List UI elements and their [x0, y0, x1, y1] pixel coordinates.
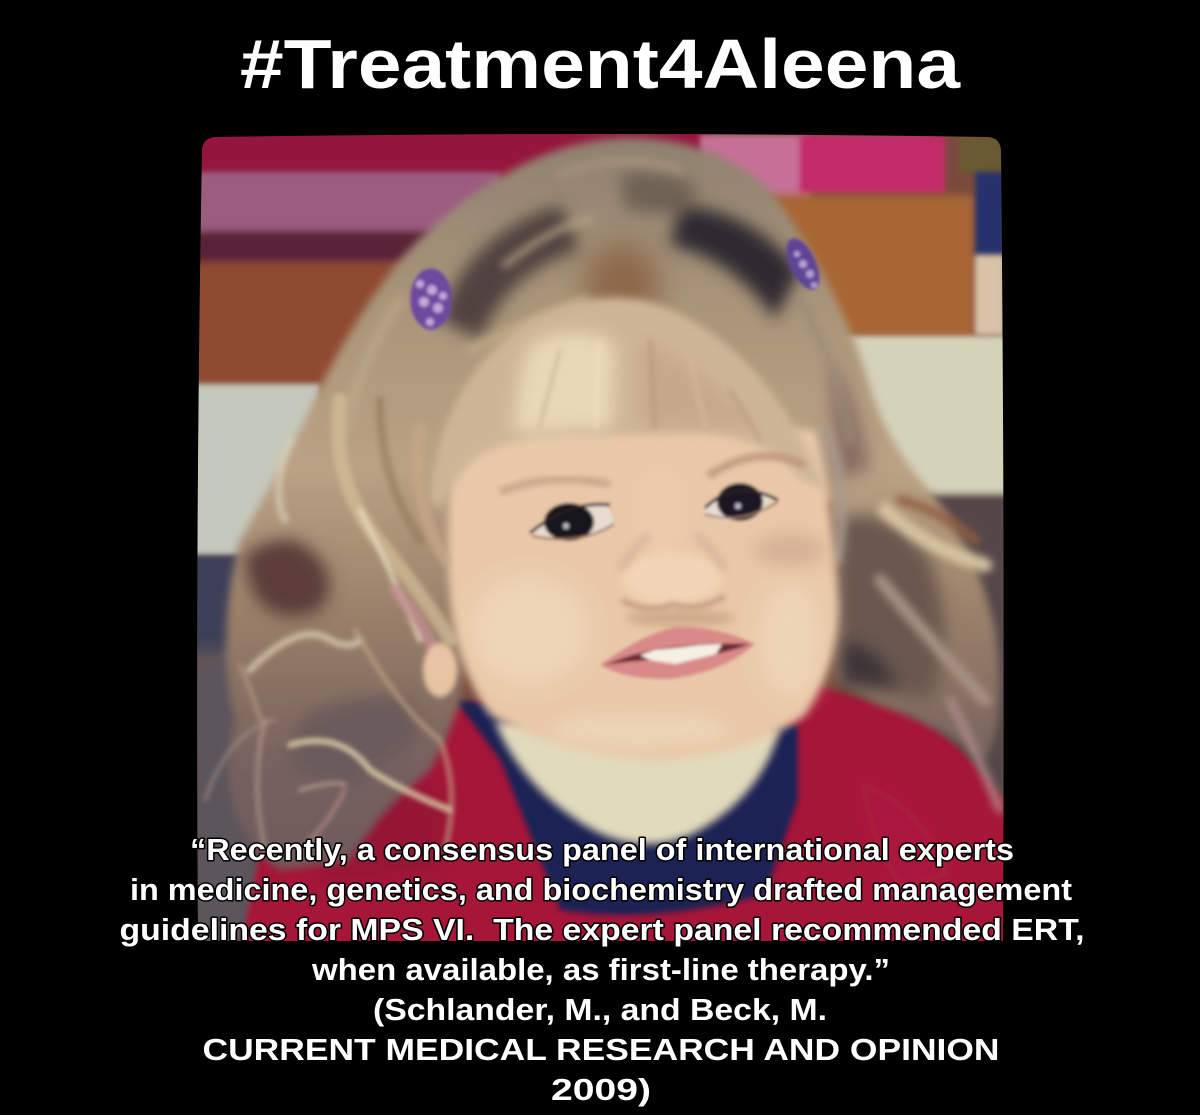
crown shadows at the parting	[440, 172, 800, 340]
shirt	[240, 680, 1010, 950]
photo: smiling girl with blonde hair	[190, 130, 1010, 950]
face	[448, 425, 838, 760]
mouth	[600, 627, 755, 679]
citation author: (Schlander, M., and Beck, M.	[373, 992, 827, 1027]
quote line 3: guidelines for MPS VI. The expert panel recommended ERT,	[120, 912, 1084, 947]
ear	[423, 643, 457, 697]
right hair shadow	[830, 360, 945, 700]
fringe	[430, 298, 825, 510]
right hair highlights	[825, 430, 1000, 810]
cheek light and shadow	[472, 532, 840, 745]
dark hair curl left	[245, 539, 420, 790]
photo background	[190, 130, 1010, 950]
quote line 2: in medicine, genetics, and biochemistry drafted management	[130, 872, 1072, 907]
quote line 4: when available, as first-line therapy.”	[311, 952, 890, 987]
right eyebrow	[708, 456, 805, 476]
neck	[495, 722, 780, 844]
left hair strands	[205, 400, 451, 850]
nose	[620, 535, 735, 627]
title: #Treatment4Aleena	[240, 25, 961, 103]
right eye	[704, 483, 778, 521]
left eye	[530, 503, 614, 541]
citation journal: CURRENT MEDICAL RESEARCH AND OPINION	[202, 1032, 1000, 1067]
left eyebrow	[500, 480, 610, 492]
citation year: 2009)	[551, 1072, 651, 1107]
quote line 1: “Recently, a consensus panel of international experts	[190, 832, 1014, 867]
crown strands	[345, 161, 850, 440]
hair mass	[226, 138, 1000, 870]
quote text	[120, 832, 1084, 1107]
parting	[584, 243, 660, 327]
fringe strands	[540, 340, 760, 440]
collar	[455, 700, 798, 915]
hair clip right	[784, 236, 822, 292]
hair clip left	[410, 268, 452, 330]
